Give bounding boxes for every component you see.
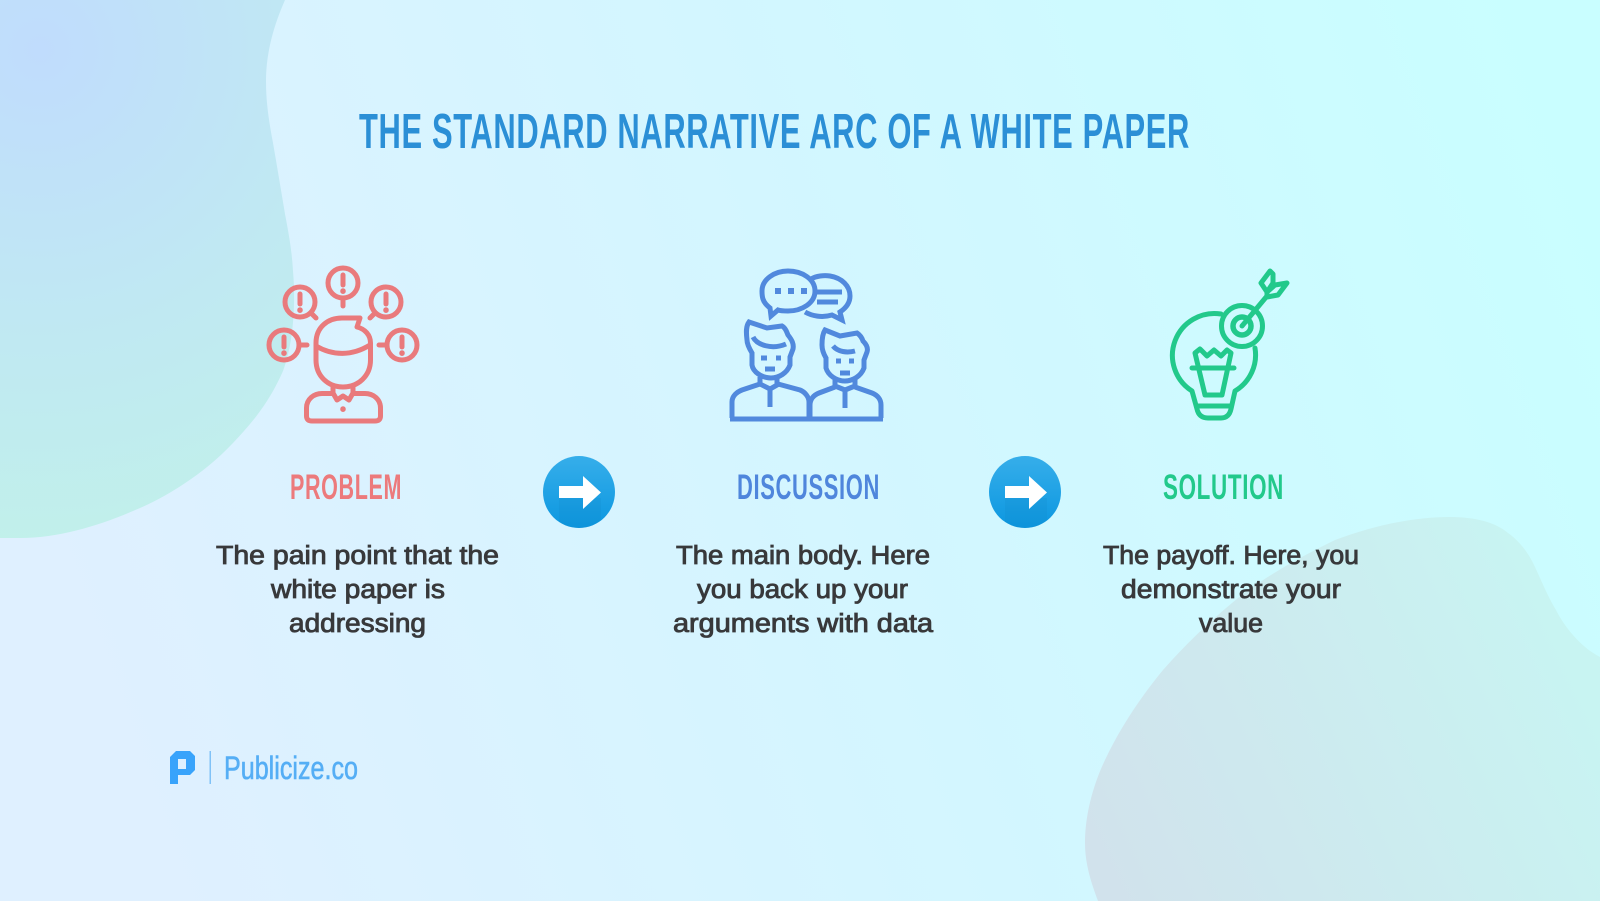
arrow: discussion to solution (989, 456, 1061, 528)
text: problem description: white paper is (270, 576, 445, 604)
text: discussion description: arguments with data (673, 610, 934, 638)
text: solution description (1103, 542, 1359, 638)
icon: two people talking (730, 271, 883, 419)
heading: solution: SOLUTION (1163, 468, 1284, 507)
panel: solution (1103, 271, 1359, 638)
text: discussion description: The main body. Here (676, 542, 930, 570)
icon: P mark (170, 751, 195, 784)
text: brand name: Publicize.co (224, 750, 358, 786)
heading: problem: PROBLEM (290, 468, 402, 507)
text: problem description (216, 542, 499, 638)
icon: light bulb with target and arrow (1172, 271, 1287, 418)
heading: discussion: DISCUSSION (737, 468, 880, 507)
logo: Publicize.co (170, 750, 358, 786)
decorative blob: top left (0, 0, 294, 538)
panel: problem (216, 268, 499, 638)
text: problem description: addressing (289, 610, 426, 638)
panel: discussion (673, 271, 934, 638)
text: discussion description: you back up your (697, 576, 909, 604)
text: solution description: The payoff. Here, you (1103, 542, 1359, 570)
text: discussion description (673, 542, 934, 638)
decorative blob: bottom right (1085, 517, 1600, 901)
text: problem description: The pain point that the (216, 542, 499, 570)
icon: person with exclamation bubbles (269, 268, 417, 421)
text: solution description: demonstrate your (1121, 576, 1342, 604)
text: solution description: value (1199, 610, 1263, 638)
arrow: problem to discussion (543, 456, 615, 528)
